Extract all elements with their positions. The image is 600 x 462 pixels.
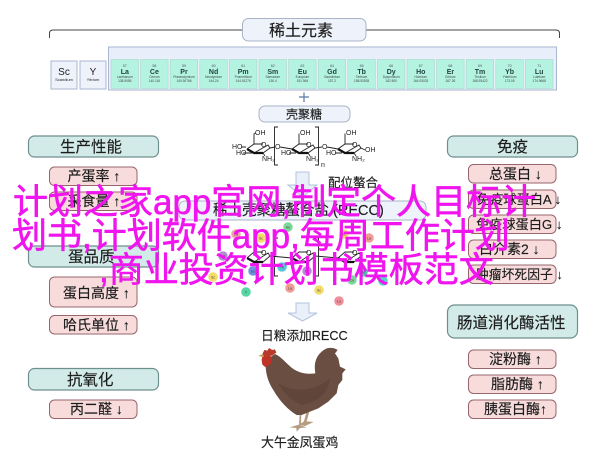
lanthanide cells: Gadolinium: [324, 75, 340, 79]
overlay watermark text: 计划之家app官网,制定个人目标计: [13, 183, 536, 222]
overlay watermark text: [12, 183, 536, 290]
lanthanide cells: 65: [360, 64, 364, 68]
metal ions: [208, 222, 388, 306]
chemical structure: chitosan: O: [261, 142, 267, 149]
lanthanide cells: Tm: [475, 69, 485, 76]
metal ions: La: [367, 236, 371, 240]
heading: intestinal digestive enzyme activity: 肠道消化酶活性: [457, 314, 566, 332]
metal ions: Tb: [280, 266, 284, 270]
item: lipase: 脂肪酶 ↑: [491, 376, 544, 392]
element: Sc: Scandium: [55, 77, 74, 82]
metal ions: La: [288, 286, 292, 290]
item: immunoglobulin A: 免疫球蛋白A ↓: [477, 192, 561, 207]
element: Sc: Sc: [58, 67, 70, 78]
item: total protein: 总蛋白 ↓: [489, 166, 542, 182]
lanthanide cells: Tb: [357, 69, 366, 76]
item: Haugh unit: 哈氏单位 ↑: [63, 317, 130, 333]
title: rare earth elements: [242, 18, 366, 41]
lanthanide cells: Lu: [535, 69, 543, 76]
panel: intestinal digestive enzyme activity: [448, 305, 578, 418]
lanthanide cells: Gd: [327, 69, 337, 76]
lanthanide cells: 58: [152, 64, 156, 68]
bracket: rare earth elements: [50, 30, 560, 38]
lanthanide cells: 66: [389, 64, 393, 68]
lanthanide cells: Ytterbium: [503, 75, 517, 79]
panel: immunity: [448, 136, 578, 284]
lanthanide cells: 150.4: [269, 79, 277, 83]
lanthanide cells: 71: [537, 64, 541, 68]
plus sign: [299, 92, 309, 102]
lanthanide cells: Erbium: [445, 75, 456, 79]
lanthanide cells: Ce: [150, 69, 159, 76]
lanthanide cells: Cerium: [149, 75, 160, 79]
heading: chitosan: 壳聚糖: [286, 106, 322, 122]
item: total protein: [468, 164, 556, 183]
metal ions: Eu: [251, 270, 255, 274]
chemical structure: chitosan: [232, 127, 376, 169]
item: tumor necrosis factor: 肿瘤坏死因子 ↓: [476, 267, 563, 282]
chemical structure: chitosan: HO: [281, 150, 292, 157]
item: laying rate: 产蛋率 ↑: [68, 168, 120, 184]
chemical structure: chitosan: HO: [232, 144, 243, 151]
item: feed intake: 采食量 ↑: [68, 193, 120, 209]
lanthanide cells: Pr: [180, 69, 188, 76]
lanthanide cells: Neodymium: [205, 75, 222, 79]
chemical structure: RECC with metal ions: [208, 222, 388, 306]
panel: antioxidation: [28, 368, 158, 418]
panel: periodic table elements: [51, 47, 556, 90]
lanthanide cells: Er: [447, 69, 454, 76]
illustration: laying hen: [258, 348, 346, 432]
item: interleukin 2: 白介素2 ↓: [479, 241, 540, 257]
metal ions: Nd: [221, 254, 225, 258]
lanthanide cells: 164.93033: [413, 79, 429, 83]
arrow: down to feed: [288, 303, 317, 321]
lanthanide cells: 61: [241, 64, 245, 68]
lanthanide cells: 162.500: [385, 79, 397, 83]
element: Sc: [51, 61, 77, 89]
title: rare earth elements: 稀土元素: [269, 22, 333, 40]
heading: RECC: 稀土壳聚糖螯合盐 (RECC): [213, 202, 384, 219]
lanthanide cells: Dysprosium: [383, 75, 400, 79]
metal ions: Sc: [317, 288, 321, 292]
lanthanide cells: Lutetium: [533, 75, 546, 79]
lanthanide cells: Samarium: [266, 75, 280, 79]
lanthanide cells: Thulium: [474, 75, 486, 79]
heading: immunity: 免疫: [497, 138, 528, 156]
lanthanide cells: 157.2: [328, 79, 336, 83]
lanthanide cells: 140.90766: [176, 79, 192, 83]
chemical structure: RECC with metal ions: O: [306, 250, 312, 257]
metal ions: Ho: [286, 226, 290, 230]
lanthanide cells: 64: [330, 64, 334, 68]
overlay watermark text: ,商业投资计划书模板范文: [99, 251, 494, 290]
lanthanide cells: 57: [123, 64, 127, 68]
chemical structure: chitosan: NH₂: [306, 156, 319, 163]
lanthanide cells: Holmium: [415, 75, 427, 79]
lanthanide cells: 138.9055: [118, 79, 132, 83]
element: Y: Y: [90, 67, 97, 78]
lanthanide cells: Yb: [505, 69, 514, 76]
metal ions: Sc: [342, 232, 346, 236]
lanthanide cells: [111, 60, 553, 88]
chemical structure: chitosan: HO: [326, 150, 337, 157]
lanthanide cells: 62: [271, 64, 275, 68]
heading: chitosan: [259, 106, 350, 122]
metal ions: Lu: [337, 300, 341, 304]
lanthanide cells: Pm: [238, 69, 249, 76]
panel: production performance: [28, 136, 158, 210]
chemical structure: chitosan: OH: [255, 130, 266, 137]
lanthanide cells: 144.24: [209, 79, 219, 83]
element: Y: [80, 61, 106, 89]
lanthanide cells: Ho: [416, 69, 425, 76]
chemical structure: chitosan: O: [322, 144, 328, 151]
metal ions: La: [234, 232, 238, 236]
panel: egg quality: [28, 246, 158, 334]
heading: immunity: [448, 136, 578, 157]
metal ions: Gd: [361, 270, 365, 274]
chemical structure: chitosan: O: [352, 142, 358, 149]
heading: production performance: 生产性能: [60, 138, 122, 156]
metal ions: Ce: [350, 278, 354, 282]
lanthanide cells: Praseodymium: [173, 75, 195, 79]
chemical structure: chitosan: NH₂: [352, 156, 365, 163]
lanthanide cells: 167.26: [446, 79, 456, 83]
lanthanide cells: 70: [508, 64, 512, 68]
item: malondialdehyde: 丙二醛 ↓: [70, 401, 123, 417]
item: amylase: 淀粉酶 ↑: [489, 351, 542, 367]
lanthanide cells: 158.92535: [354, 79, 369, 83]
heading: antioxidation: 抗氧化: [67, 371, 114, 389]
lanthanide cells: 168.93422: [472, 79, 488, 83]
heading: RECC: [179, 201, 426, 220]
item: albumen height: 蛋白高度 ↑: [63, 285, 130, 301]
lanthanide cells: Dy: [387, 69, 396, 76]
chemical structure: chitosan: O: [275, 144, 281, 151]
chemical structure: chitosan: NH₂: [262, 156, 275, 163]
lanthanide cells: 60: [212, 64, 216, 68]
lanthanide cells: Europium: [296, 75, 310, 79]
metal ions: Y: [245, 290, 248, 294]
lanthanide cells: Terbium: [356, 75, 368, 79]
chemical structure: chitosan: O: [306, 142, 312, 149]
heading: egg quality: 蛋品质: [68, 248, 115, 266]
lanthanide cells: Eu: [298, 69, 307, 76]
lanthanide cells: 59: [182, 64, 186, 68]
lanthanide cells: Promethium: [235, 75, 252, 79]
arrow: down to RECC: [288, 172, 317, 197]
lanthanide panel: [108, 47, 556, 90]
lanthanide cells: 140.116: [149, 79, 160, 83]
chemical structure: chitosan: n: [321, 162, 325, 169]
lanthanide cells: Sm: [267, 69, 278, 76]
element: Y: Yttrium: [87, 77, 100, 82]
lanthanide cells: 151.964: [297, 79, 308, 83]
overlay watermark text: 划书,计划软件app,每周工作计划: [12, 217, 510, 256]
chemical structure: chitosan: OH: [365, 147, 376, 154]
metal ions: Y: [382, 280, 385, 284]
lanthanide cells: Nd: [209, 69, 218, 76]
chemical structure: chitosan: HO: [236, 150, 247, 157]
lanthanide cells: 67: [419, 64, 423, 68]
item: interleukin 2: [468, 240, 556, 258]
label: dietary RECC: 日粮添加RECC: [261, 329, 348, 343]
chemical structure: RECC with metal ions: O: [261, 250, 267, 257]
lanthanide cells: 144.91276: [236, 79, 251, 83]
label: Dawu golden phoenix hen: 大午金凤蛋鸡: [261, 435, 338, 450]
metal ions: Sc: [259, 236, 263, 240]
lanthanide cells: 173.05: [505, 79, 515, 83]
metal ions: Sc: [211, 276, 215, 280]
item: trypsin: 胰蛋白酶↑: [484, 401, 547, 417]
lanthanide cells: 68: [448, 64, 452, 68]
metal ions: Nd: [305, 270, 309, 274]
chemical structure: RECC with metal ions: O: [352, 250, 358, 257]
lanthanide cells: 174.9668: [533, 79, 546, 83]
lanthanide cells: La: [121, 69, 129, 76]
chemical structure: chitosan: OH: [300, 130, 310, 137]
lanthanide cells: Lanthanum: [117, 75, 133, 79]
label: coordination chelation: 配位螯合: [328, 175, 379, 190]
item: immunoglobulin G: 免疫球蛋白G ↓: [476, 217, 562, 232]
lanthanide cells: 69: [478, 64, 482, 68]
lanthanide cells: 63: [300, 64, 304, 68]
chemical structure: chitosan: OH: [346, 130, 356, 137]
